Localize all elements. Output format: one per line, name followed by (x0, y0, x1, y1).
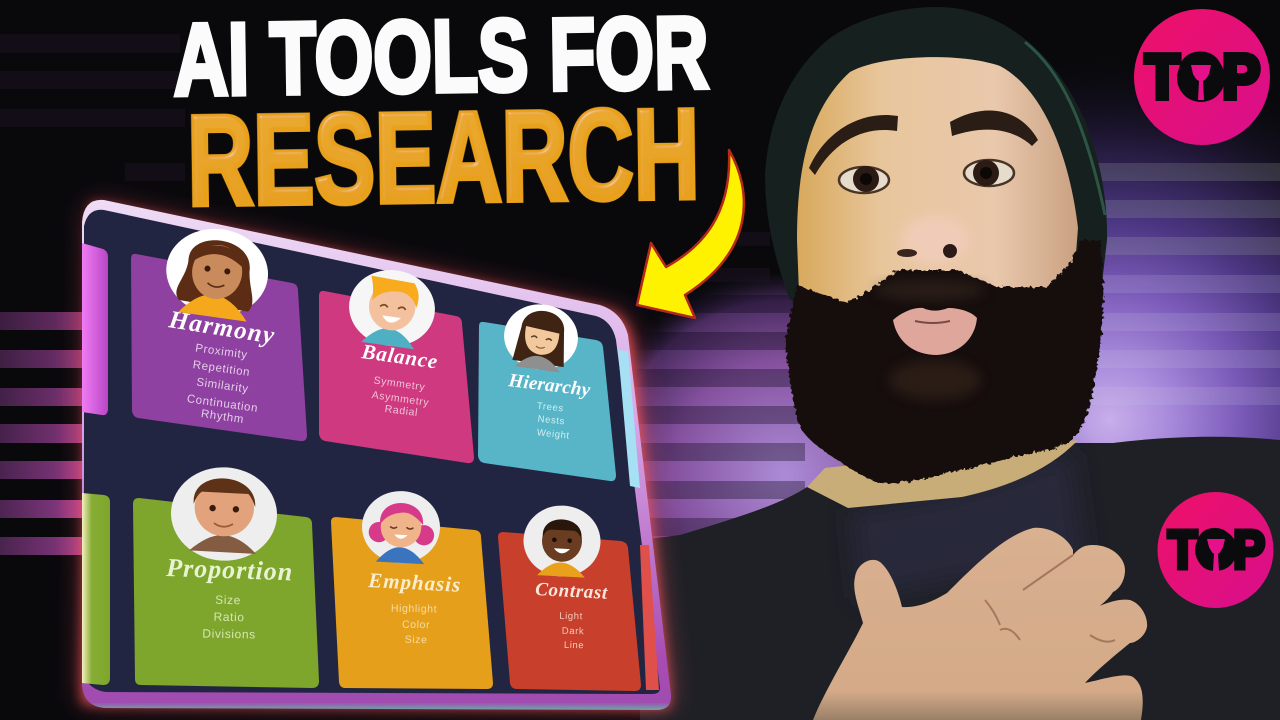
card: Proportion: Ratio (213, 610, 245, 624)
mouth line (915, 321, 950, 323)
card: Emphasis: Emphasis (367, 568, 461, 597)
card: Contrast: Line (564, 640, 584, 651)
card: Hierarchy: Weight (536, 427, 570, 442)
beard brown tone under lips (889, 360, 981, 400)
card: Emphasis (331, 517, 493, 689)
hair highlight (1025, 42, 1105, 215)
card: Balance: Asymmetry (371, 389, 430, 409)
card: Hierarchy: Trees (536, 401, 564, 414)
card: Harmony: Harmony (166, 306, 277, 350)
card: Harmony: Repetition (192, 359, 251, 379)
shirt chest tone (850, 450, 1085, 600)
hand (813, 528, 1147, 720)
eye left (839, 166, 889, 193)
arrow: yellow curved pointer (637, 150, 744, 318)
card: Contrast: Dark (562, 626, 584, 637)
neck (807, 440, 1078, 508)
presenter photo (640, 7, 1280, 720)
card: Balance: Radial (384, 403, 419, 419)
card: Emphasis: Highlight (391, 603, 437, 615)
card: Emphasis: Size (405, 634, 428, 646)
eyebrow right (950, 110, 1038, 146)
logo: TOP badge upper: TOP (1145, 43, 1260, 112)
tablet with design-principle cards (82, 200, 671, 710)
logo: TOP badge lower (1158, 492, 1274, 608)
card: Proportion: Divisions (202, 627, 256, 641)
avatar: Emphasis girl (360, 489, 442, 565)
tablet frame (82, 200, 671, 710)
avatar: Proportion man (169, 465, 279, 563)
lips (893, 308, 977, 355)
card: Harmony (131, 254, 307, 441)
nose (897, 216, 969, 264)
title: RESEARCH: RESEARCH (186, 83, 700, 233)
eyebrow left (809, 115, 898, 175)
card: Proportion: Proportion (165, 553, 293, 586)
tablet tight glow (82, 203, 670, 708)
card: Harmony: Proximity (194, 342, 248, 362)
card: Hierarchy (478, 322, 616, 481)
card: Contrast: Light (559, 611, 583, 622)
avatar: Hierarchy girl (500, 300, 582, 374)
card: Emphasis: Color (402, 619, 430, 631)
icon: trophy (1191, 65, 1211, 100)
card: Hierarchy: Hierarchy (506, 370, 592, 401)
avatar: Contrast man (522, 504, 602, 578)
beard (785, 240, 1103, 483)
card: Hierarchy: Nests (537, 414, 565, 427)
face (797, 57, 1078, 330)
O backing (1177, 54, 1225, 102)
avatar: Harmony woman (160, 222, 274, 324)
card: Harmony: Rhythm (200, 408, 245, 426)
card: Balance: Balance (359, 339, 439, 374)
logo: TOP badge upper (1134, 9, 1270, 145)
card: Balance: Symmetry (373, 374, 426, 394)
logo: TOP badge lower: TOP (1168, 520, 1265, 580)
icon: trophy (1207, 539, 1225, 571)
tablet red glow (84, 205, 670, 705)
card: Harmony: Continuation (186, 393, 259, 415)
card: Proportion (133, 498, 319, 688)
O backing (1195, 529, 1237, 571)
card: Contrast (498, 532, 641, 691)
avatar: Balance boy (344, 265, 440, 351)
card: Balance (319, 291, 474, 463)
hair (765, 7, 1107, 300)
shirt (640, 437, 1280, 720)
card: Proportion: Size (215, 593, 241, 607)
moustache brown tone (875, 280, 985, 300)
tablet screen (84, 210, 660, 694)
card: Contrast: Contrast (535, 579, 608, 604)
card: Harmony: Similarity (196, 376, 249, 396)
eye right (964, 160, 1014, 186)
partial side cards (82, 243, 659, 690)
